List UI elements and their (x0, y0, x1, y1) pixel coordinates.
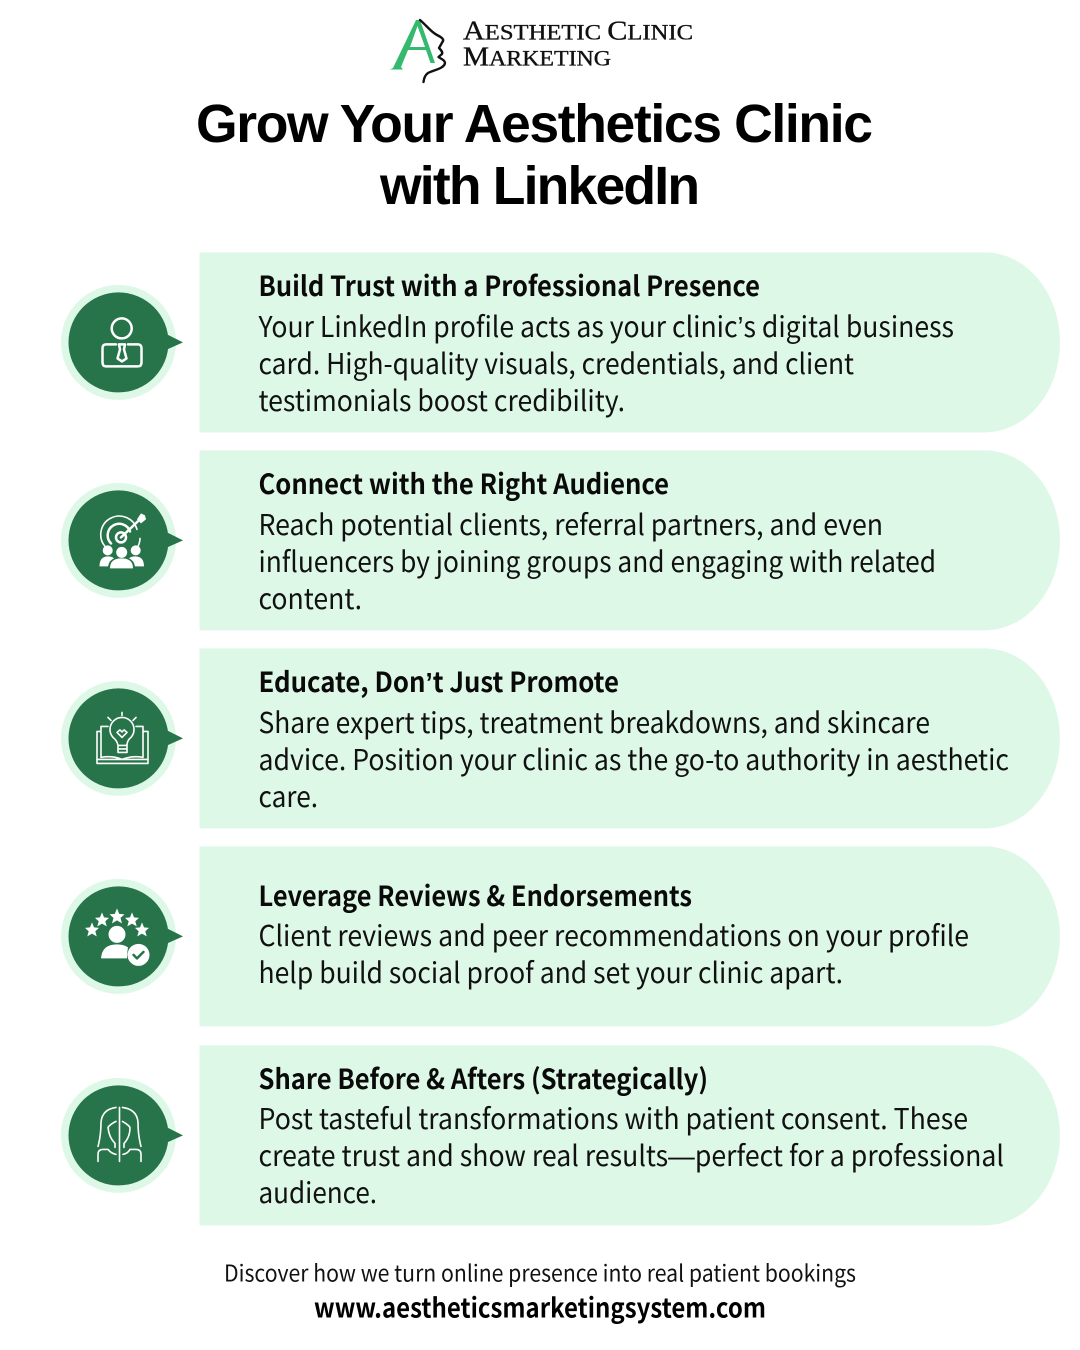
panel body text: Your LinkedIn profile acts as your clinic’s digital business (258, 305, 954, 346)
panel body text: audience. (258, 1171, 377, 1212)
panel body text: Share expert tips, treatment breakdowns, and skincare (258, 701, 930, 742)
icon: target and audience (61, 483, 183, 598)
panel body text: card. High-quality visuals, credentials, and client (258, 342, 854, 383)
panel body text (258, 701, 1009, 816)
panel background (200, 846, 1060, 1026)
title: Grow Your Aesthetics Clinic (196, 95, 873, 154)
panel body text: Client reviews and peer recommendations on your profile (258, 914, 969, 955)
icon: split face (61, 1078, 183, 1193)
footer (224, 1254, 856, 1326)
panel 2: right audience (200, 450, 1060, 630)
panel 1: professional presence (200, 252, 1060, 432)
logo (390, 16, 693, 82)
panel body text (258, 305, 954, 420)
panel body text (258, 914, 969, 992)
panel body text: advice. Position your clinic as the go-to authority in aesthetic (258, 738, 1009, 779)
panel background (200, 648, 1060, 828)
panel body text: care. (258, 775, 318, 816)
panel heading: Connect with the Right Audience (258, 462, 669, 502)
panel body text: Reach potential clients, referral partners, and even (258, 503, 883, 544)
title (196, 95, 873, 216)
logo: MARKETING (463, 42, 611, 72)
icon: person with tie (61, 285, 183, 400)
panel background (200, 1045, 1060, 1225)
panel body text: create trust and show real results—perfect for a professional (258, 1134, 1004, 1175)
footer website: www.aestheticsmarketingsystem.com (314, 1286, 766, 1326)
panel body text: content. (258, 577, 362, 618)
icon: book and light bulb (61, 681, 183, 796)
panel body text: Post tasteful transformations with patient consent. These (258, 1097, 968, 1138)
logo mark: face profile (420, 20, 445, 82)
panel heading: Share Before & Afters (Strategically) (258, 1057, 708, 1097)
panel body text (258, 1097, 1004, 1212)
panel body text: testimonials boost credibility. (258, 379, 625, 420)
title: with LinkedIn (379, 157, 700, 216)
panel 3: educate (200, 648, 1060, 828)
panel 4: reviews (200, 846, 1060, 1026)
logo mark: green A (390, 20, 435, 70)
panel body text: influencers by joining groups and engaging with related (258, 540, 936, 581)
panel heading: Leverage Reviews & Endorsements (258, 874, 692, 914)
panel background (200, 252, 1060, 432)
footer tagline: Discover how we turn online presence into real patient bookings (224, 1254, 856, 1288)
panel background (200, 450, 1060, 630)
panel heading: Build Trust with a Professional Presence (258, 264, 760, 304)
panel body text: help build social proof and set your clinic apart. (258, 951, 843, 992)
icon: five stars with reviewer (61, 879, 183, 994)
panel heading: Educate, Don’t Just Promote (258, 660, 619, 700)
logo wordmark: AESTHETIC CLINIC (463, 16, 693, 46)
panel body text (258, 503, 936, 618)
panel 5: before and afters (200, 1045, 1060, 1225)
